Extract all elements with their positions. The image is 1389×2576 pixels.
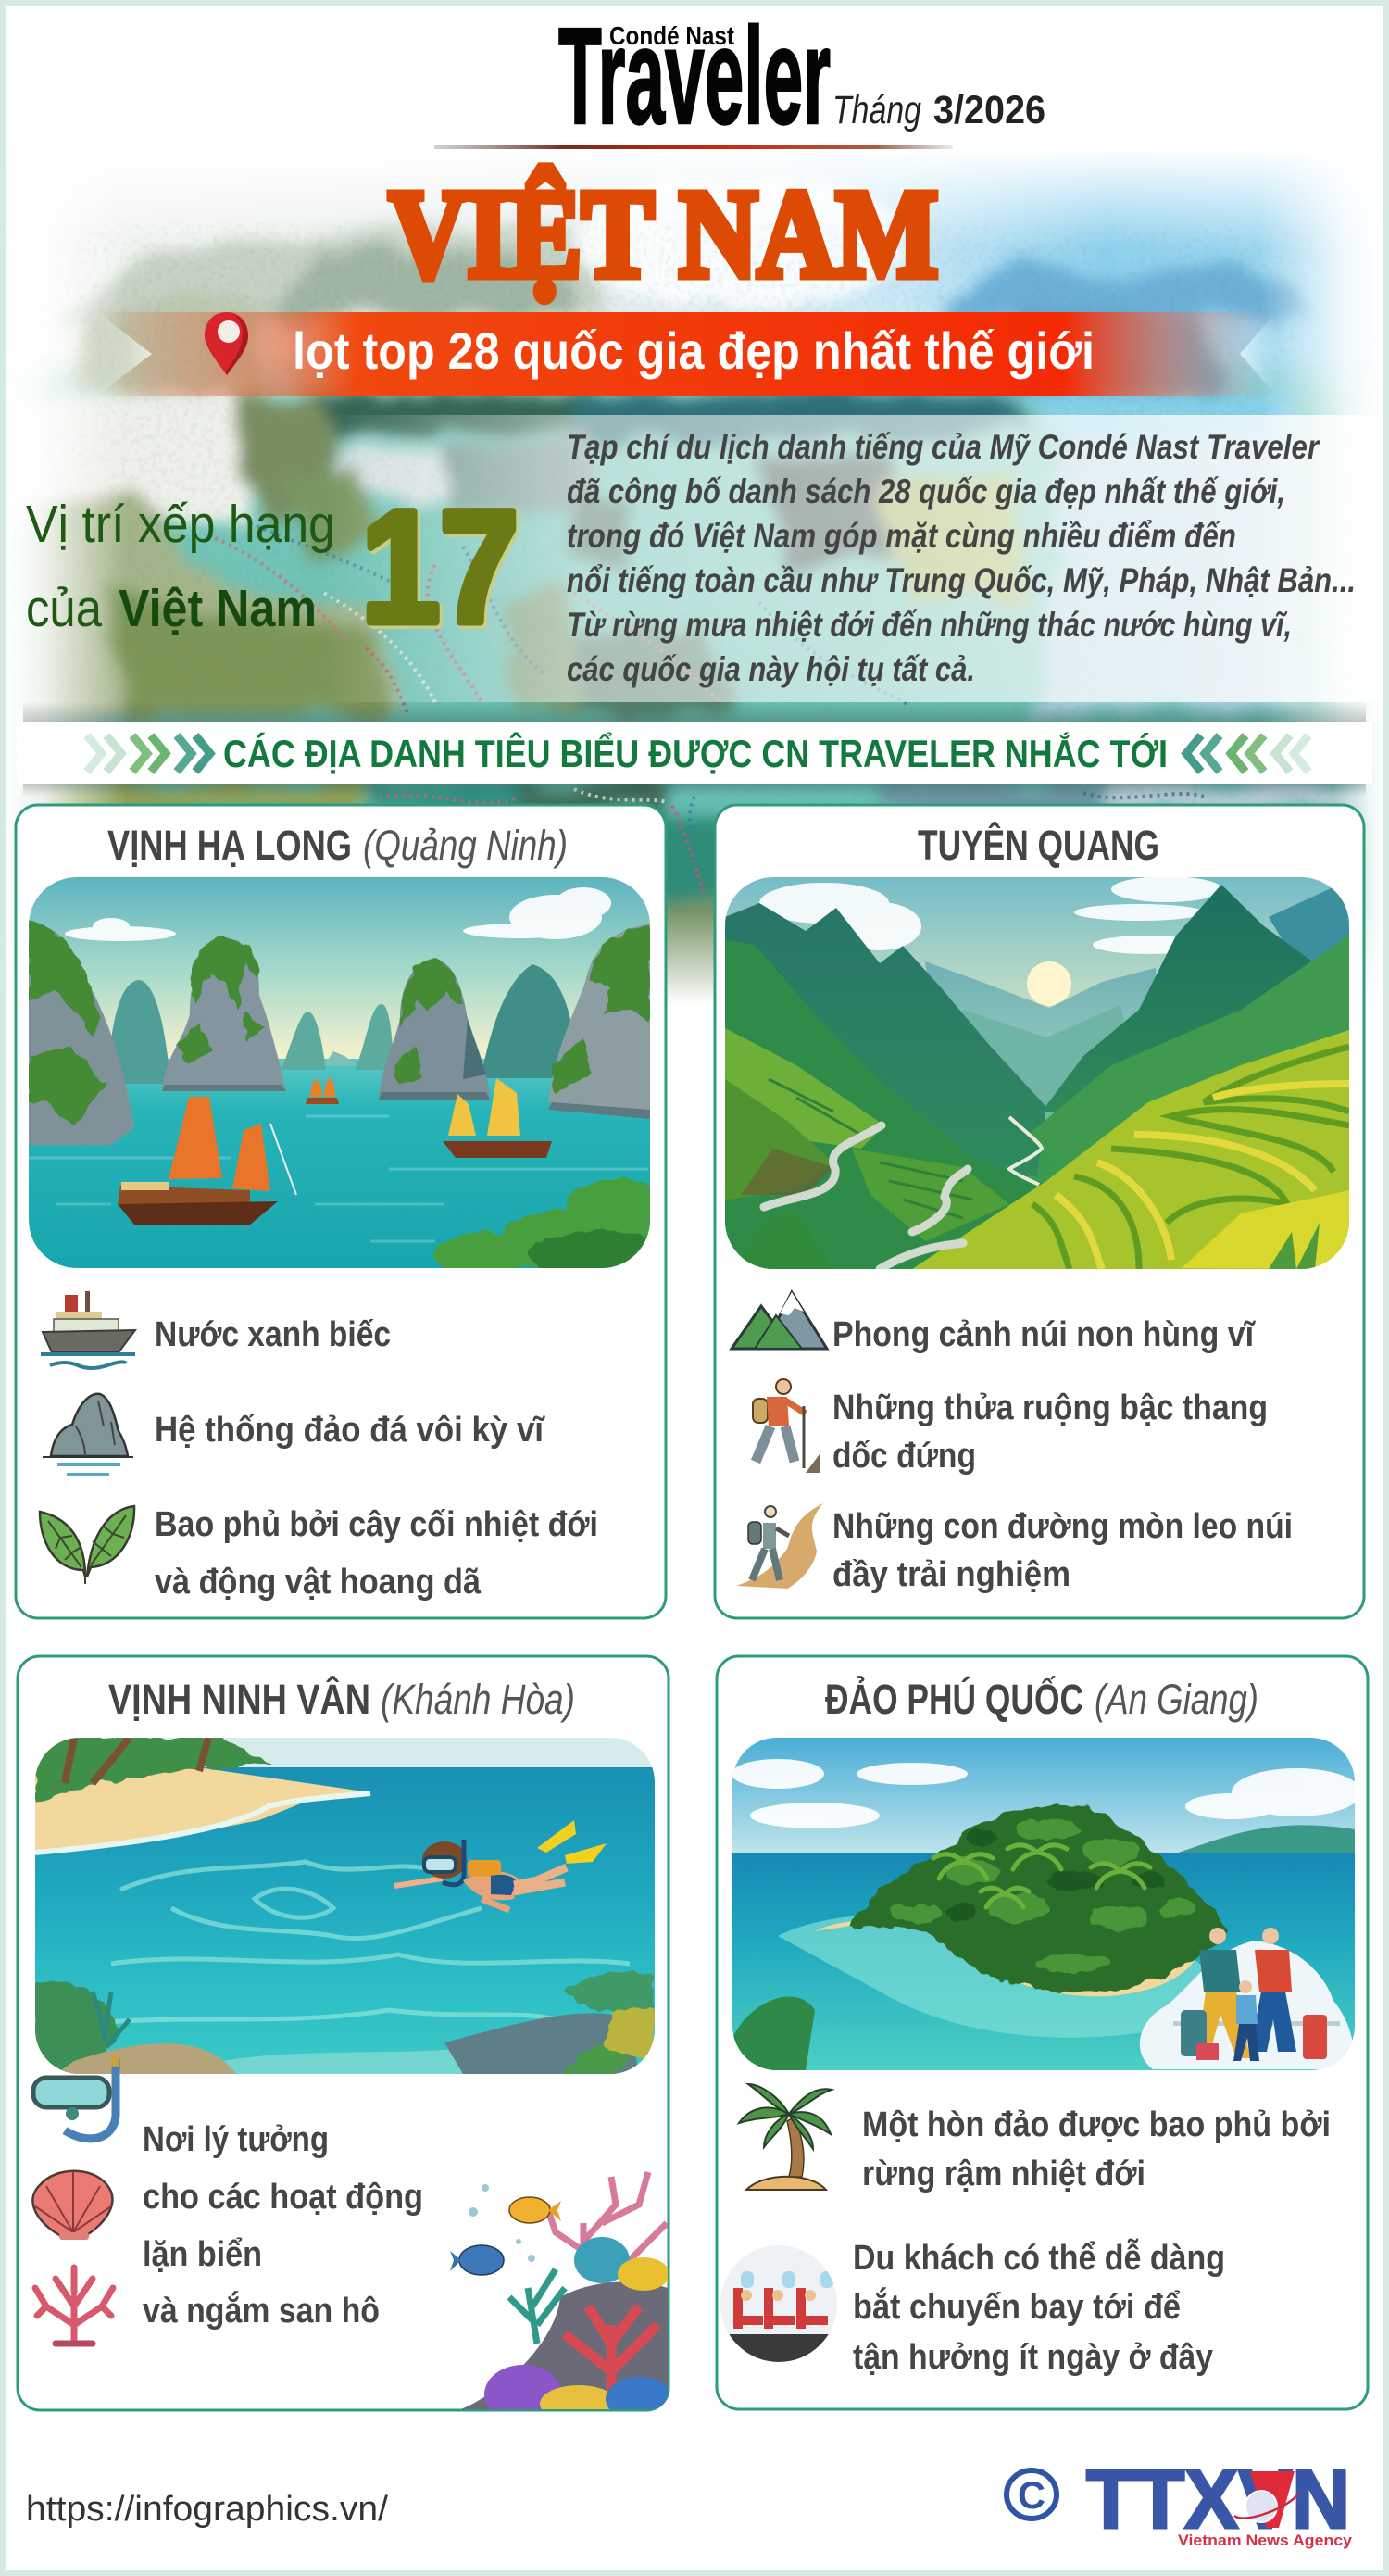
- icon: mountains: [732, 1292, 827, 1349]
- heading: Vịnh Hạ Long: [107, 822, 568, 869]
- heading: Vịnh Hạ Long: VỊNH HẠ LONG: [107, 822, 352, 869]
- panel: Tuyên Quang: [715, 805, 1364, 1618]
- publication date: 3/2026: [933, 88, 1045, 132]
- illustration: tropical island and family: [732, 1738, 1361, 2070]
- logo: TTXVN: Vietnam News Agency: [1178, 2532, 1353, 2549]
- icon: leaves: [40, 1506, 134, 1584]
- heading text: CÁC ĐỊA DANH TIÊU BIỂU ĐƯỢC CN TRAVELER NHẮC TỚI: [223, 731, 1168, 775]
- bullet text: Những thửa ruộng bậc thang: [832, 1389, 1268, 1427]
- intro paragraph: các quốc gia này hội tụ tất cả.: [567, 650, 975, 688]
- logo: Condé Nast Traveler: Traveler: [558, 0, 831, 153]
- icon: hiker with pole: [741, 1379, 820, 1473]
- main title: VIỆT NAM: VIỆT NAM: [389, 165, 938, 304]
- bullet text: Bao phủ bởi cây cối nhiệt đới: [155, 1505, 598, 1544]
- bullet text: lặn biển: [143, 2235, 262, 2274]
- bullet text: bắt chuyến bay tới để: [853, 2286, 1181, 2327]
- icon: yellow fish: [509, 2197, 561, 2223]
- heading: Đảo Phú Quốc: ĐẢO PHÚ QUỐC: [825, 1676, 1083, 1723]
- banner: top 28: [97, 312, 1276, 396]
- bullet text: tận hưởng ít ngày ở đây: [853, 2338, 1213, 2377]
- ranking label: của: [26, 579, 102, 638]
- logo: Condé Nast Traveler: [558, 0, 831, 153]
- bullet text: đầy trải nghiệm: [832, 1555, 1070, 1594]
- icon: hiker on trail: [736, 1503, 823, 1589]
- icon: shell: [32, 2171, 112, 2240]
- icon: coral: [35, 2268, 113, 2344]
- background: aerial photo of Ha Long Bay: [0, 148, 1383, 1028]
- divider rule: [434, 145, 953, 149]
- bullet text: cho các hoạt động: [143, 2178, 423, 2217]
- publication date: [832, 88, 1045, 132]
- intro paragraph: [567, 428, 1356, 688]
- ranking number 17: 17: [361, 478, 519, 656]
- intro paragraph: trong đó Việt Nam góp mặt cùng nhiều điểm đến: [567, 517, 1236, 555]
- bullet text: Nơi lý tưởng: [143, 2120, 329, 2159]
- heading: Vịnh Ninh Vân: VỊNH NINH VÂN: [108, 1676, 370, 1723]
- illustration: bay with snorkeler: [35, 1738, 655, 2074]
- bullet text: Phong cảnh núi non hùng vĩ: [832, 1315, 1256, 1354]
- bullet text: [853, 2105, 1331, 2377]
- source url: https://infographics.vn/: [26, 2490, 388, 2529]
- panel: Vịnh Hạ Long: [16, 805, 676, 1618]
- bullet text: Du khách có thể dễ dàng: [853, 2237, 1225, 2278]
- icon: snorkel mask: [33, 2055, 119, 2139]
- heading: Vịnh Ninh Vân: (Khánh Hòa): [381, 1676, 575, 1723]
- left chevrons: [87, 735, 210, 772]
- section heading strip: [17, 722, 1372, 784]
- icon: palm tree: [739, 2084, 832, 2190]
- floating fishing villages: [208, 523, 1204, 894]
- logo: TTXVN: TTXVN: [1086, 2454, 1350, 2546]
- icon: blue fish: [450, 2245, 504, 2275]
- ranking label: [26, 495, 335, 638]
- illustration: mountains and rice terraces: [725, 876, 1349, 1269]
- bullet text: dốc đứng: [832, 1437, 976, 1476]
- heading: Tuyên Quang: TUYÊN QUANG: [918, 822, 1159, 869]
- bullet text: và ngắm san hô: [143, 2290, 380, 2331]
- bullet text: và động vật hoang dã: [155, 1563, 482, 1602]
- bullet text: rừng rậm nhiệt đới: [862, 2155, 1145, 2193]
- icon: location pin: [205, 312, 248, 375]
- bullet text: Một hòn đảo được bao phủ bởi: [862, 2105, 1331, 2144]
- panel: Đảo Phú Quốc: [717, 1656, 1368, 2409]
- heading: Đảo Phú Quốc: (An Giang): [1095, 1676, 1258, 1723]
- banner text: lọt top 28 quốc gia đẹp nhất thế giới: [293, 321, 1095, 380]
- copyright symbol: C: [1018, 2473, 1045, 2517]
- icon: airplane cabin: [720, 2245, 837, 2364]
- icon: limestone island: [43, 1394, 133, 1475]
- copyright symbol: [1007, 2470, 1057, 2519]
- ranking number 17: 17: [364, 481, 521, 659]
- bullet text: Hệ thống đảo đá vôi kỳ vĩ: [155, 1411, 545, 1450]
- icon: ship: [41, 1291, 135, 1368]
- bullet text: [155, 1315, 598, 1602]
- panel: Vịnh Ninh Vân: [18, 1656, 672, 2424]
- illustration: coral reef and fish: [450, 2172, 672, 2424]
- bullet text: [143, 2120, 423, 2331]
- ranking label: Việt Nam: [119, 579, 317, 638]
- illustration: Ha Long Bay junk boats: [29, 877, 676, 1279]
- ranking label: Vị trí xếp hạng: [26, 495, 335, 554]
- publication date: Tháng: [832, 88, 921, 132]
- bullet text: [832, 1315, 1293, 1594]
- bullet text: Nước xanh biếc: [155, 1315, 391, 1354]
- heading: Vịnh Hạ Long: (Quảng Ninh): [363, 822, 568, 869]
- right chevrons: [1186, 735, 1308, 772]
- logo: Condé Nast Traveler: Condé Nast: [609, 21, 734, 50]
- heading: Vịnh Ninh Vân: [108, 1676, 575, 1723]
- bullet text: Những con đường mòn leo núi: [832, 1507, 1293, 1546]
